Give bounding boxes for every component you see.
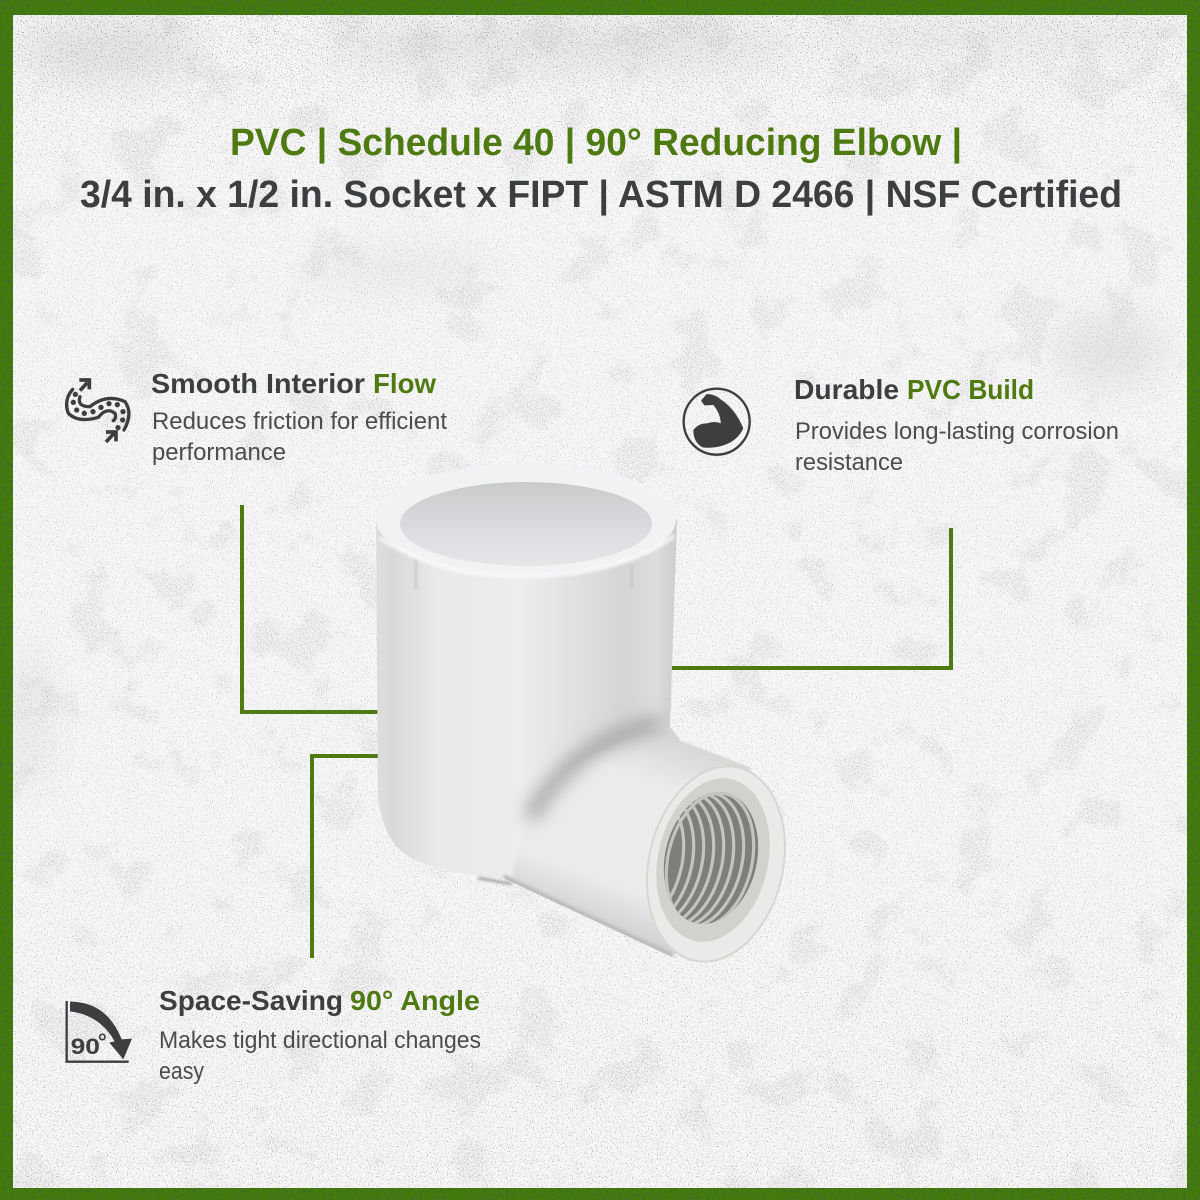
heading: Space-Saving (159, 985, 343, 1016)
icon: flexed arm (684, 389, 750, 455)
threaded face outer ring (628, 752, 804, 976)
top rim (376, 463, 676, 575)
icon: 90 degree angle: 90 (71, 1034, 100, 1059)
description: Provides long-lasting corrosion (795, 418, 1119, 445)
heading: Flow (373, 368, 436, 399)
icon: 90 degree angle (67, 1001, 132, 1062)
title (80, 122, 1122, 216)
title: PVC | Schedule 40 | 90° Reducing Elbow | (230, 122, 962, 164)
description: Reduces friction for efficient (152, 408, 447, 435)
internal threads (664, 792, 758, 924)
description: easy (159, 1058, 204, 1085)
heading (794, 374, 1034, 405)
contact shadow (478, 878, 512, 884)
description: resistance (795, 449, 903, 476)
heading: PVC Build (907, 374, 1034, 405)
connector line: smooth interior flow (242, 505, 380, 712)
product image: PVC reducing elbow (376, 463, 804, 976)
socket opening (400, 482, 652, 566)
description: performance (152, 439, 286, 466)
description (795, 418, 1119, 476)
icon: flow path (67, 380, 129, 442)
callout: durable PVC build (684, 374, 1119, 476)
callout: space-saving angle (67, 985, 481, 1085)
mold seams (416, 558, 632, 590)
callout: smooth interior flow (67, 368, 447, 466)
heading: 90° Angle (350, 985, 480, 1016)
shadow at branch junction (503, 722, 672, 957)
description (159, 1027, 481, 1085)
elbow body (376, 520, 680, 905)
heading: Durable (794, 374, 899, 405)
reducing branch (512, 727, 752, 957)
description (152, 408, 447, 466)
connector line: space-saving angle (312, 756, 380, 958)
heading (159, 985, 480, 1016)
title: 3/4 in. x 1/2 in. Socket x FIPT | ASTM D 2466 | NSF Certified (80, 174, 1122, 216)
description: Makes tight directional changes (159, 1027, 481, 1054)
connector line: durable PVC build (670, 528, 951, 668)
heading: Smooth Interior (151, 368, 365, 399)
threaded face inner ring (641, 767, 785, 953)
